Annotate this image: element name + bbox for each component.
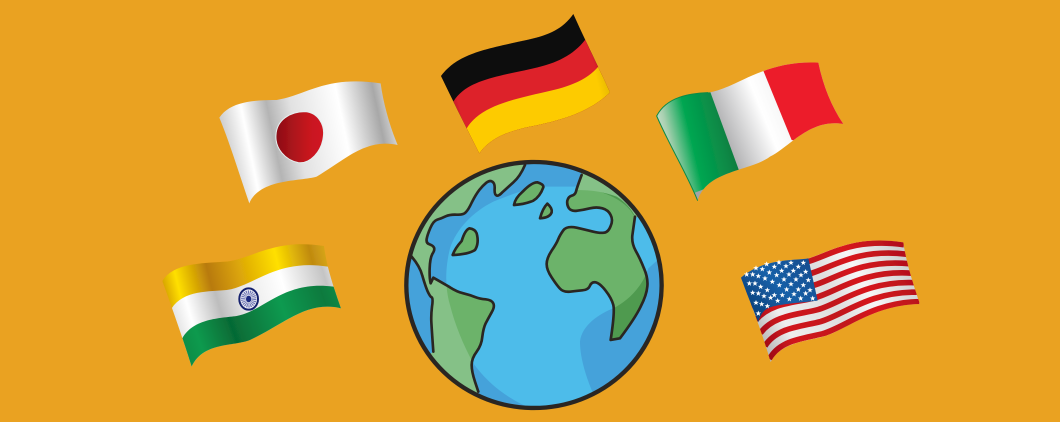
land: Africa shaded tip bbox=[601, 192, 646, 338]
canton with stars bbox=[741, 258, 818, 322]
island: Hudson bbox=[453, 228, 478, 255]
globe bbox=[400, 155, 670, 415]
flag: Japan bbox=[219, 81, 398, 203]
coastlines bbox=[412, 165, 647, 392]
island: Iceland bbox=[540, 204, 552, 218]
illustration: globe surrounded by five flags bbox=[162, 14, 920, 410]
red stripes bbox=[742, 243, 919, 359]
Ashoka chakra bbox=[239, 288, 258, 310]
flag: USA bbox=[741, 241, 920, 362]
flag: India bbox=[162, 244, 341, 366]
ocean bbox=[408, 164, 660, 406]
island: Greenland bbox=[514, 182, 543, 205]
red disc bbox=[276, 112, 324, 163]
land: light base bbox=[412, 164, 524, 394]
flag: Italy bbox=[656, 62, 844, 201]
flag: Germany bbox=[441, 14, 610, 154]
globe outline bbox=[406, 162, 662, 408]
